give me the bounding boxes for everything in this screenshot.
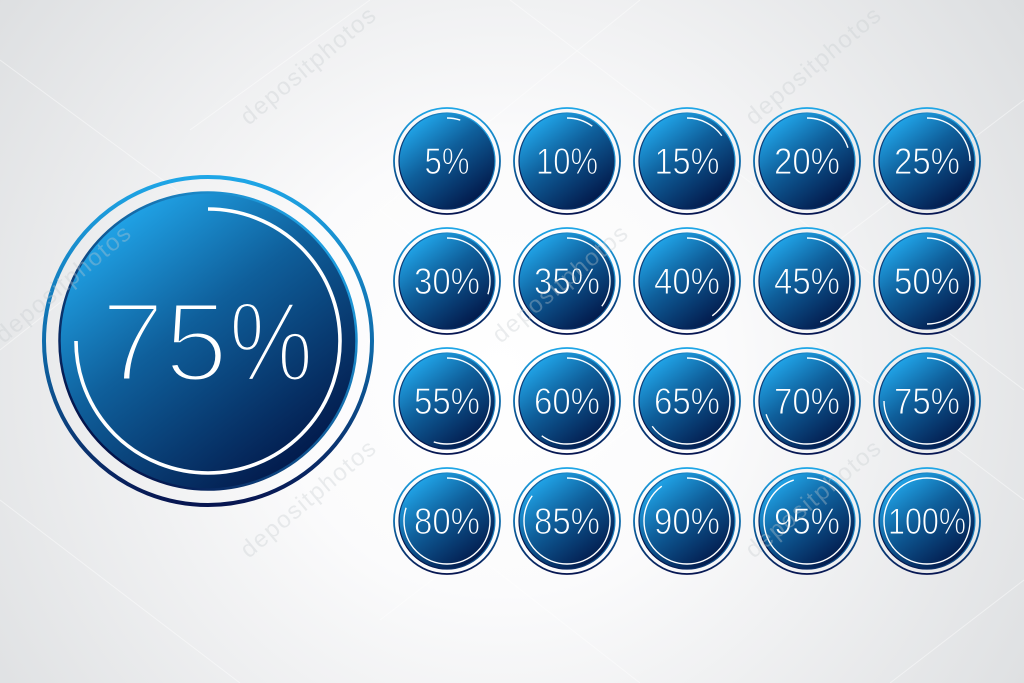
gauge 30%: 30%: [414, 261, 480, 302]
gauge 25%: [874, 108, 980, 214]
gauge 65%: 65%: [654, 381, 720, 422]
gauge 70%: 70%: [774, 381, 840, 422]
gauge 25%: 25%: [894, 141, 960, 182]
gauge 40%: 40%: [654, 261, 720, 302]
gauge 55%: 55%: [414, 381, 480, 422]
gauge 85%: 85%: [534, 501, 600, 542]
gauge 10%: 10%: [536, 141, 598, 182]
watermark text: depositphotos: [740, 2, 886, 131]
gauge 70%: [754, 348, 860, 454]
gauge 20%: 20%: [774, 141, 840, 182]
gauge 35%: 35%: [534, 261, 600, 302]
watermark text: [0, 2, 886, 564]
gauge 10%: [514, 108, 620, 214]
gauge 90%: 90%: [654, 501, 720, 542]
gauge 100%: [874, 468, 980, 574]
watermark text: depositphotos: [235, 435, 381, 564]
gauge 80%: [394, 468, 500, 574]
gauge 55%: [394, 348, 500, 454]
gauge 40%: [634, 228, 740, 334]
gauge 5%: [394, 108, 500, 214]
watermark text: depositphotos: [740, 435, 886, 564]
gauge 30%: [394, 228, 500, 334]
gauge 100%: 100%: [888, 501, 966, 542]
gauge 65%: [634, 348, 740, 454]
large gauge: 75%: 75: [101, 279, 228, 405]
gauge 60%: [514, 348, 620, 454]
gauge 50%: 50%: [894, 261, 960, 302]
gauge 80%: 80%: [414, 501, 480, 542]
watermark text: depositphotos: [235, 2, 381, 131]
gauge 85%: [514, 468, 620, 574]
gauge 5%: 5%: [424, 141, 470, 182]
large gauge: 75%: [44, 177, 372, 505]
large gauge: 75%: %: [229, 279, 313, 405]
gauge 35%: [514, 228, 620, 334]
gauge 60%: 60%: [534, 381, 600, 422]
gauge 50%: [874, 228, 980, 334]
gauge 95%: 95%: [774, 501, 840, 542]
gauge 20%: [754, 108, 860, 214]
gauge 45%: 45%: [774, 261, 840, 302]
gauge 95%: [754, 468, 860, 574]
gauge 75%: [874, 348, 980, 454]
gauge 75%: 75%: [894, 381, 960, 422]
gauge 45%: [754, 228, 860, 334]
watermark text: depositphotos: [487, 220, 633, 349]
gauge 15%: [634, 108, 740, 214]
gauge 90%: [634, 468, 740, 574]
gauge 15%: 15%: [654, 141, 720, 182]
